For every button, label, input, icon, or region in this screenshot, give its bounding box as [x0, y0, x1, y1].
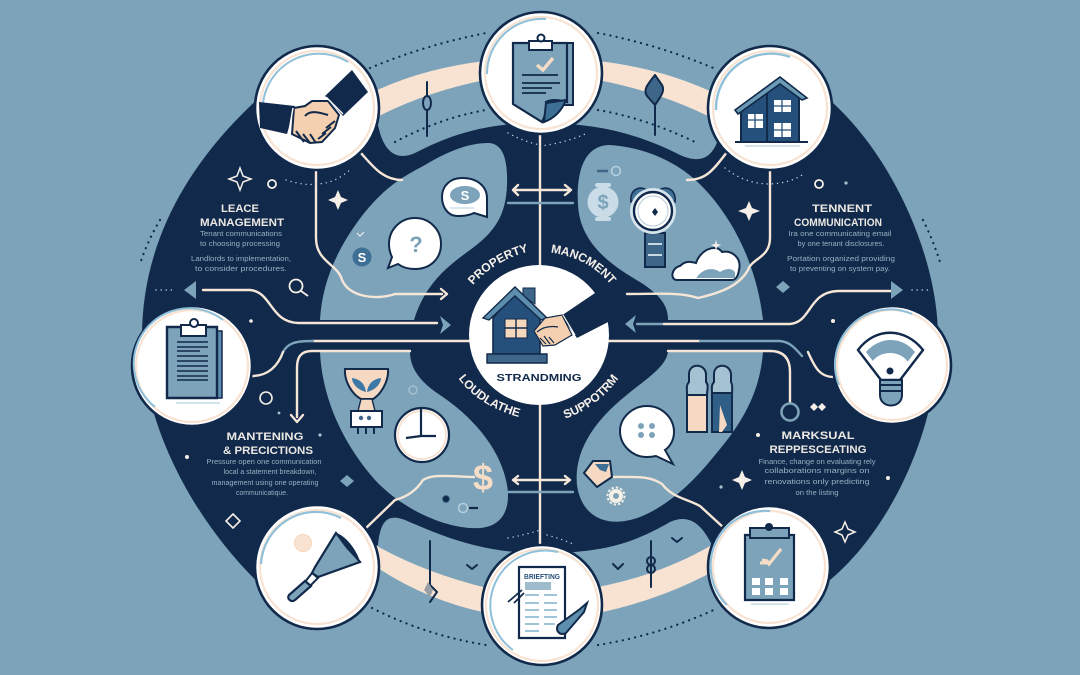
circle node: funnel tool (bottom left) — [255, 505, 379, 629]
text block: maintenance and predictions: MANTENING — [226, 431, 304, 443]
text block: marketing and reporting: MARKSUAL — [782, 430, 855, 442]
curved hub labels: SUPPOTRM — [564, 374, 618, 418]
circle node: checklist document (top) — [480, 12, 602, 134]
icon: dollar coin small — [352, 232, 372, 266]
icon: speech bubble with dots — [620, 406, 674, 464]
text block: lease management: MANAGEMENT — [200, 217, 284, 229]
text block: tenant communication: Ira one communicating email — [788, 231, 892, 238]
circle node: handshake (top left) — [255, 46, 379, 170]
circle node: document with pen (bottom center): BRIEFTING — [524, 574, 561, 581]
text block: maintenance and predictions: communicatique. — [236, 490, 288, 497]
text block: marketing and reporting: collaborations margins on — [764, 468, 870, 475]
text block: lease management — [191, 203, 291, 273]
text block: tenant communication: COMMUNICATION — [794, 217, 882, 229]
icon: slider — [597, 166, 620, 176]
text block: maintenance and predictions — [206, 431, 322, 497]
text block: tenant communication — [787, 203, 895, 273]
text block: lease management: LEACE — [221, 203, 259, 215]
icon: alarm clock magnifier — [630, 188, 676, 267]
text block: tenant communication: TENNENT — [812, 203, 872, 215]
circle node: house (top right) — [708, 46, 832, 170]
text block: maintenance and predictions: management using one operating — [212, 480, 319, 487]
text block: tenant communication: to preventing on system pay. — [790, 266, 890, 273]
sparkle decorations — [185, 133, 890, 545]
hub handshake hand — [534, 315, 575, 346]
text block: tenant communication: Portation organized providing — [787, 256, 895, 263]
circle node: fan bulb (right) — [833, 306, 951, 424]
blue arrowheads — [184, 281, 903, 420]
curved hub labels: PROPERTY — [468, 244, 526, 284]
text block: lease management: to consider procedures. — [195, 266, 287, 273]
text block: maintenance and predictions: local a statement breakdown, — [224, 469, 317, 476]
text block: lease management: to choosing processing — [200, 241, 280, 248]
icon: speech bubble with question mark — [388, 218, 441, 269]
text block: marketing and reporting: renovations only predicting — [764, 479, 870, 486]
hub caption: STRANDMING — [496, 372, 582, 384]
icon: dollar coin small: S — [358, 250, 367, 265]
curved hub labels: LOUDLATHE — [458, 374, 520, 417]
dotted arcs — [370, 33, 718, 645]
text block: marketing and reporting: REPPESCEATING — [770, 444, 866, 456]
icon: pentagon badge and gear — [584, 461, 624, 504]
dotted edge accents — [140, 220, 940, 290]
icon: dollar coin light — [588, 183, 618, 221]
circle node: calendar (bottom right) — [708, 506, 830, 628]
text block: lease management: Tenant communications — [200, 231, 283, 238]
icon: speech bubble with dollar: S — [461, 188, 470, 203]
text block: marketing and reporting — [758, 430, 876, 497]
stem knots on the band — [423, 75, 682, 602]
text block: maintenance and predictions: & PRECICTIONS — [223, 445, 313, 457]
circle node: clipboard (left) — [132, 306, 252, 426]
icon: speech bubble with dollar — [442, 178, 487, 217]
text block: tenant communication: by one tenant disclosures. — [798, 241, 885, 248]
curved hub labels: MANCMENT — [551, 244, 617, 282]
hub sleeve — [561, 291, 612, 338]
text block: marketing and reporting: on the listing — [796, 490, 839, 497]
peach ring segments — [375, 61, 712, 613]
icon: speech bubble with question mark: ? — [409, 232, 423, 257]
icon: dollar coin light: $ — [597, 192, 609, 214]
text block: maintenance and predictions: Pressure open one communication — [206, 459, 322, 466]
icon: clock — [395, 408, 449, 462]
icon: two people — [687, 366, 732, 432]
dark central body — [142, 95, 938, 592]
icon: dollar sign: $ — [473, 457, 493, 498]
icon: dollar sign — [442, 457, 493, 512]
text block: lease management: Landlords to implementation, — [191, 256, 291, 263]
inner blue lobes — [320, 143, 763, 528]
central hub — [469, 265, 612, 405]
icon: magnifier — [290, 280, 308, 296]
connector lines — [203, 135, 892, 548]
curved hub labels — [458, 244, 618, 418]
text block: marketing and reporting: Finance, change on evaluating rely — [758, 459, 876, 466]
circle node: document with pen (bottom center) — [482, 545, 602, 665]
hub house icon — [483, 287, 547, 363]
icon: cloud — [672, 240, 740, 280]
icon: sprout emblem — [345, 369, 417, 434]
